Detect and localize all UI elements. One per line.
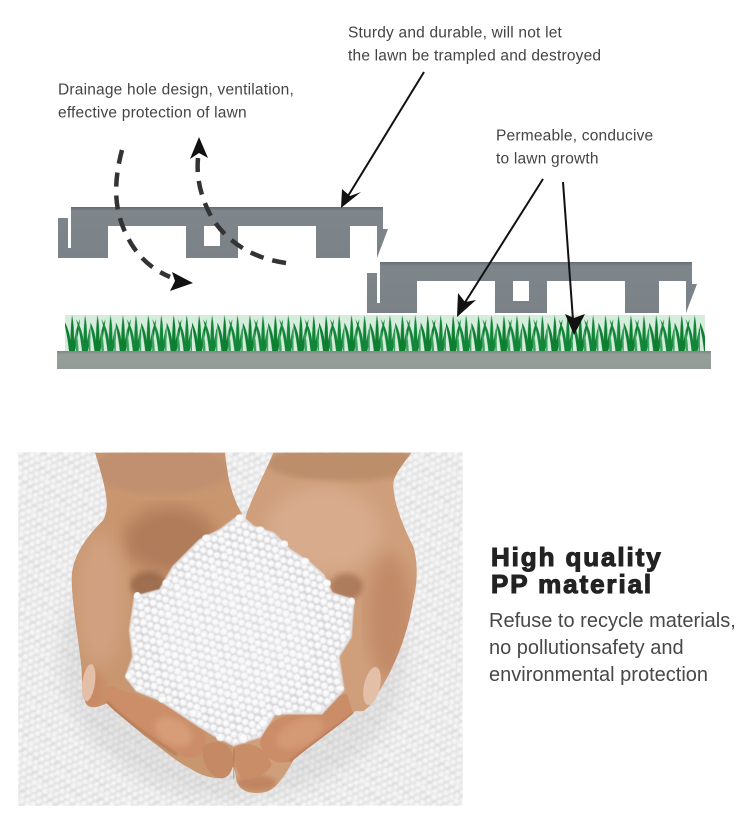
- arrow: to grass left: [457, 179, 543, 317]
- grass strip: [65, 315, 705, 351]
- photo: hands holding PP pellets: [18, 445, 463, 806]
- text: sturdy and durable note: the lawn be trampled and destroyed: [348, 48, 601, 64]
- text: sturdy and durable note: [348, 24, 601, 64]
- left hand: [72, 452, 242, 778]
- text: permeable note: to lawn growth: [496, 150, 599, 168]
- lower paver plate: [367, 262, 697, 313]
- text: drainage hole note: [58, 82, 294, 122]
- arrow: dashed airflow down: [116, 150, 193, 291]
- text: material description: environmental protection: [489, 664, 708, 686]
- fingernail right: [363, 667, 381, 705]
- arrow: to grass right: [563, 182, 585, 335]
- text: drainage hole note: effective protection of lawn: [58, 104, 247, 122]
- base soil layer: [57, 351, 711, 369]
- heading: High quality PP material: [491, 542, 663, 599]
- heading: High quality PP material: PP material: [491, 569, 653, 599]
- arrow: dashed airflow up: [190, 137, 286, 263]
- pellet heap: [125, 514, 355, 745]
- hand photo group: [60, 445, 423, 800]
- lower center fingers: [203, 742, 272, 779]
- text: drainage hole note: Drainage hole design, ventilation,: [58, 82, 294, 98]
- text: sturdy and durable note: Sturdy and durable, will not let: [348, 24, 563, 42]
- fingernail left: [82, 664, 96, 702]
- hand shadow: [60, 513, 407, 800]
- pellet background: [18, 452, 463, 806]
- upper paver plate: [58, 207, 388, 258]
- heading: High quality PP material: High quality: [491, 542, 663, 572]
- text: permeable note: [496, 128, 653, 168]
- text: material description: no pollutionsafety and: [489, 637, 684, 659]
- text: permeable note: Permeable, conducive: [496, 128, 653, 144]
- text: material description: Refuse to recycle materials,: [489, 610, 736, 632]
- right hand: [227, 445, 423, 797]
- arrow: to upper plate: [341, 72, 424, 208]
- panel: paver diagram: [57, 24, 711, 369]
- text: material description: [489, 610, 736, 686]
